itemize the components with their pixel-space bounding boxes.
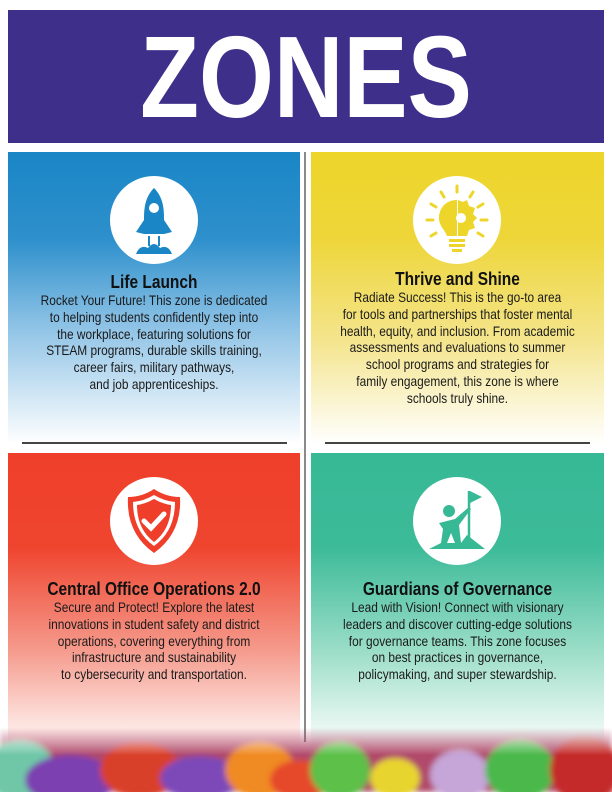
text block bbox=[41, 292, 267, 392]
heading: Central Office Operations 2.0 bbox=[47, 579, 261, 599]
text block: career fairs, military pathways, bbox=[74, 359, 234, 375]
text block bbox=[48, 599, 260, 682]
text block: Radiate Success! This is the go-to area bbox=[354, 289, 561, 305]
text block: to helping students confidently step into bbox=[50, 309, 258, 325]
text block: Rocket Your Future! This zone is dedicated bbox=[41, 292, 267, 308]
text block: school programs and strategies for bbox=[366, 356, 549, 372]
panel: Guardians of Governance bbox=[311, 453, 604, 792]
text block bbox=[340, 289, 575, 406]
text block: infrastructure and sustainability bbox=[72, 649, 236, 665]
text block: leaders and discover cutting-edge solutions bbox=[343, 616, 572, 632]
icon: rocket bbox=[110, 176, 198, 264]
text block: schools truly shine. bbox=[407, 390, 508, 406]
panel: Central Office Operations 2.0 bbox=[8, 453, 300, 792]
panel: Life Launch bbox=[8, 152, 300, 444]
icon: leader with flag bbox=[413, 477, 501, 565]
text block: for governance teams. This zone focuses bbox=[349, 633, 566, 649]
text block: family engagement, this zone is where bbox=[356, 373, 559, 389]
heading: Guardians of Governance bbox=[363, 579, 552, 599]
photo strip: festival dancers bbox=[0, 729, 612, 792]
text block: innovations in student safety and district bbox=[48, 616, 260, 632]
panel: Thrive and Shine bbox=[311, 152, 604, 444]
heading: Life Launch bbox=[111, 272, 197, 292]
header banner bbox=[8, 10, 604, 143]
text block: on best practices in governance, bbox=[372, 649, 543, 665]
text block: for tools and partnerships that foster mental bbox=[343, 306, 572, 322]
text block: policymaking, and super stewardship. bbox=[358, 666, 557, 682]
text block: Lead with Vision! Connect with visionary bbox=[351, 599, 564, 615]
text block bbox=[343, 599, 572, 682]
text block: assessments and evaluations to summer bbox=[350, 339, 565, 355]
text block: the workplace, featuring solutions for bbox=[57, 326, 251, 342]
icon: lightbulb bbox=[413, 176, 501, 264]
divider vertical bbox=[304, 152, 306, 742]
text block: operations, covering everything from bbox=[58, 633, 250, 649]
text block: to cybersecurity and transportation. bbox=[61, 666, 247, 682]
icon: shield bbox=[110, 477, 198, 565]
text block: STEAM programs, durable skills training, bbox=[46, 342, 262, 358]
text block: and job apprenticeships. bbox=[89, 376, 219, 392]
heading: Thrive and Shine bbox=[395, 269, 520, 289]
text block: Secure and Protect! Explore the latest bbox=[54, 599, 254, 615]
title: ZONES bbox=[140, 12, 472, 142]
text block: health, equity, and inclusion. From academic bbox=[340, 323, 575, 339]
